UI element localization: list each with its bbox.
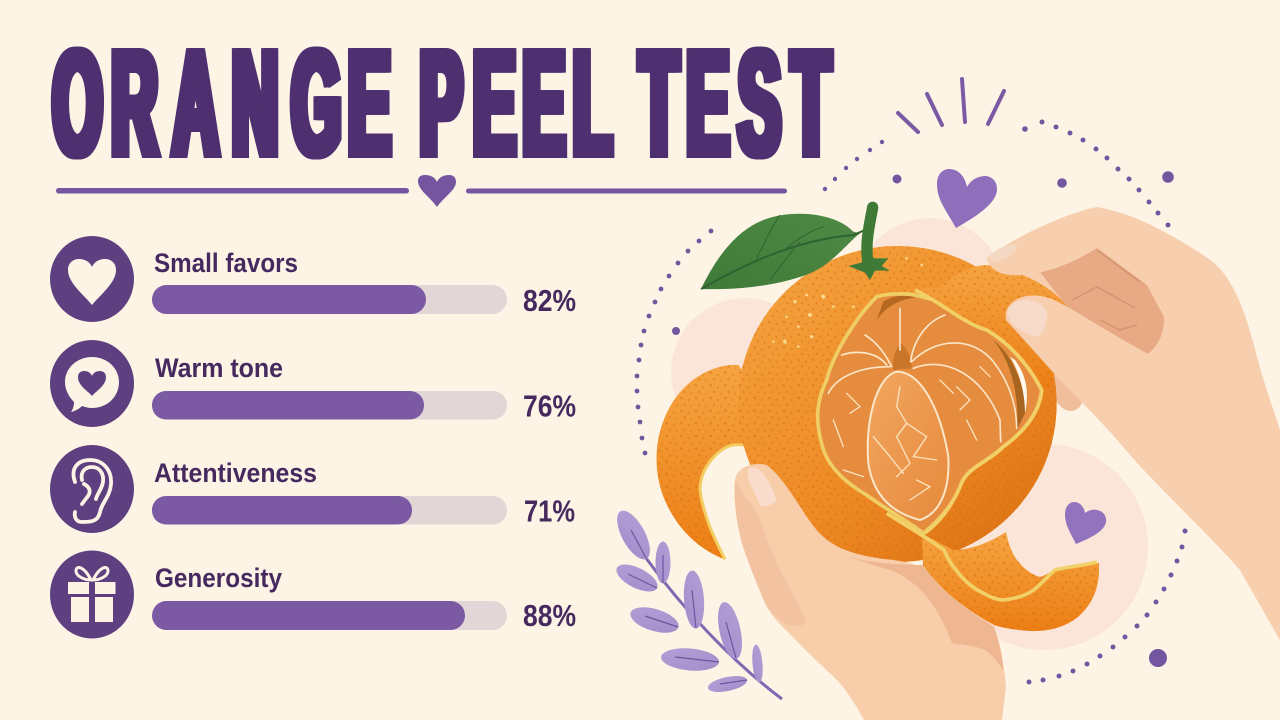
orange body — [738, 246, 1057, 562]
row: attentiveness — [50, 445, 575, 533]
illustration: thumb and index finger over peel — [987, 207, 1280, 640]
stem and leaf — [701, 207, 890, 289]
progress bar 82 — [152, 285, 507, 314]
title divider with heart — [56, 175, 787, 207]
icon: large purple heart — [937, 169, 997, 228]
icon: heart in circle — [50, 236, 134, 322]
value 88: 88% — [523, 598, 576, 633]
sparkle rays — [898, 79, 1004, 132]
icon: gift box — [50, 550, 134, 638]
value 82: 82% — [523, 283, 576, 318]
label: attentiveness: Attentiveness — [154, 458, 317, 488]
row: generosity — [50, 550, 576, 638]
icon: small purple heart — [1065, 502, 1106, 544]
left peel curl — [657, 365, 768, 559]
illustration: right hand behind orange — [987, 207, 1280, 640]
bottom peel strip — [887, 487, 1099, 631]
progress bar 88 — [152, 601, 507, 630]
icon: ear — [50, 445, 134, 533]
top right peel flap — [915, 265, 1068, 487]
row: warm tone — [50, 340, 576, 427]
label: warm tone: Warm tone — [155, 353, 283, 383]
icon: speech bubble heart — [50, 340, 134, 427]
exposed fruit — [818, 294, 1042, 533]
decorative dotted arcs — [635, 120, 1188, 684]
value 71: 71% — [524, 494, 575, 528]
row: small favors — [50, 236, 576, 322]
label: generosity: Generosity — [155, 563, 282, 593]
label: small favors: Small favors — [154, 248, 298, 278]
illustration: peeled orange — [657, 207, 1068, 562]
illustration: left hand holding orange — [735, 464, 1006, 720]
value 76: 76% — [523, 388, 576, 424]
progress bar 76 — [152, 391, 507, 420]
title: ORANGE PEEL TEST — [53, 21, 830, 186]
lavender sprig — [611, 506, 782, 699]
soft background blobs — [671, 218, 1148, 650]
progress bar 71 — [152, 496, 507, 524]
